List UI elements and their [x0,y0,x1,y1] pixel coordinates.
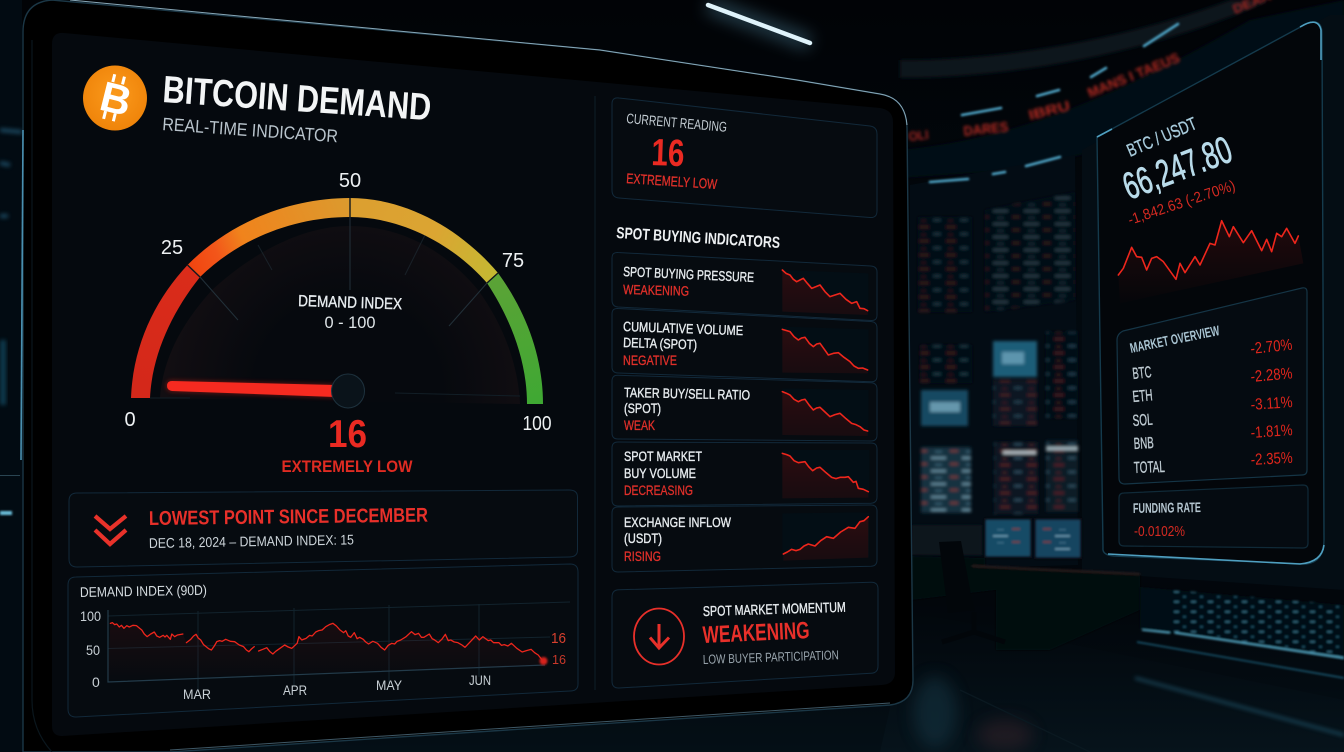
indicator: taker buy/sell ratio: (SPOT) [624,401,661,416]
gauge orange segment [188,198,350,277]
title: BITCOIN DEMAND [161,69,433,129]
market overview card: MARKET OVERVIEW [1128,322,1221,356]
market overview card: ETH [1132,387,1153,406]
indicator: spot market buy volume: DECREASING [624,483,693,498]
indicator: cumulative volume delta: NEGATIVE [623,353,677,368]
market overview card: SOL [1132,412,1153,430]
chart title: DEMAND INDEX (90D) [80,582,207,600]
indicator: exchange inflow [612,505,877,572]
y axis labels: 100 [80,608,101,624]
funding rate card [1119,485,1308,548]
pair label: BTC / USDT [1124,113,1200,161]
market panel [1097,22,1324,564]
scale label 100: 100 [522,413,552,435]
x axis labels: MAY [376,677,403,693]
section heading: spot buying indicators: SPOT BUYING INDICATORS [616,225,781,252]
market overview card: -2.70% [1250,337,1293,358]
dashboard screen [52,33,895,736]
y axis labels [80,608,101,690]
momentum note: LOW BUYER PARTICIPATION [703,647,839,667]
reading status: EXTREMELY LOW [626,170,718,192]
indicator: taker buy/sell ratio: WEAK [624,418,655,433]
secondary value label: 16 [552,652,566,667]
needle hub [332,374,364,408]
indicator: spot market buy volume: BUY VOLUME [624,466,696,481]
sparkline [782,388,869,436]
indicator: cumulative volume delta: DELTA (SPOT) [623,335,697,352]
background ticker [908,0,1274,144]
gauge value: 16 [328,413,367,456]
gauge yellow segment [350,198,498,283]
sparkline [782,327,869,373]
indicator: exchange inflow: EXCHANGE INFLOW [624,515,731,530]
momentum value: WEAKENING [702,617,810,649]
reading value: 16 [651,132,685,175]
background wall screens [912,192,1078,555]
gauge range: 0 - 100 [324,313,376,332]
ceiling light [708,5,810,43]
price change: -1,842.63 (-2.70%) [1126,177,1238,229]
gauge green segment [487,273,543,404]
indicator: spot buying pressure [612,252,877,321]
market overview card: TOTAL [1134,459,1165,477]
header: logo and title [83,66,433,146]
background ticker: MANS I TAEUS [1085,49,1182,101]
scale label 25: 25 [161,237,183,259]
sparkline [782,270,868,315]
main dashboard bezel [21,0,913,752]
indicator: taker buy/sell ratio [612,375,877,441]
market overview card: -2.28% [1250,365,1293,386]
background light strips [930,24,1178,182]
indicator: exchange inflow: RISING [624,549,661,564]
sparkline [782,450,869,498]
y axis labels: 0 [92,674,100,690]
panel highlight edges [1097,22,1324,564]
callout: lowest point [69,490,578,567]
chart axes [108,610,545,682]
gauge interior [160,226,520,404]
panel: spot market momentum [612,582,878,688]
market overview card: -1.81% [1250,422,1293,442]
indicator: spot market buy volume: SPOT MARKET [624,449,702,464]
icon: bitcoin coin [83,66,147,130]
gauge tick lines [200,217,487,326]
needle [166,380,335,398]
subtitle: REAL-TIME INDICATOR [162,114,339,146]
indicator: taker buy/sell ratio: TAKER BUY/SELL RATIO [624,385,750,403]
background ticker: IBRU [1027,97,1071,123]
indicator: spot buying pressure: WEAKENING [623,282,689,299]
line chart: demand index 90d [68,564,578,717]
sparkline [782,512,869,561]
background data strip [1137,587,1344,678]
chart grid [108,602,570,692]
market overview card: -2.35% [1250,450,1293,469]
x axis labels: MAR [183,686,211,702]
gauge red segment [131,265,200,398]
market overview card: BTC [1132,364,1152,383]
indicator: cumulative volume delta [612,308,877,382]
desk with monitors and chair [912,519,1140,650]
callout detail: DEC 18, 2024 – DEMAND INDEX: 15 [149,531,354,551]
background ticker: DARES [963,118,1009,139]
price line chart [1118,221,1303,303]
scale label 0: 0 [124,409,136,431]
momentum label: SPOT MARKET MOMENTUM [703,599,846,619]
gauge separators [188,198,498,283]
indicator: exchange inflow: (USDT) [624,531,662,546]
x axis labels: JUN [469,672,491,688]
callout heading: LOWEST POINT SINCE DECEMBER [149,505,428,530]
current point marker [540,657,548,665]
market overview card: BNB [1133,435,1154,453]
market overview card: -3.11% [1250,394,1293,414]
x axis labels: APR [283,682,307,698]
y axis labels: 50 [86,642,100,658]
scale label 75: 75 [502,250,524,272]
scale label 50: 50 [339,170,361,192]
column divider [594,96,596,690]
panel frame [1097,22,1324,564]
icon: bitcoin coin: B [96,72,136,125]
funding rate card: -0.0102% [1134,523,1185,540]
gauge baseline [150,393,520,398]
x axis labels [183,672,491,702]
gauge caption: DEMAND INDEX [298,293,403,313]
floor reflections [913,676,1344,752]
gauge [124,170,552,476]
icon: down arrow in circle [634,608,684,664]
current value label: 16 [551,630,566,647]
market overview card [1117,288,1307,484]
indicator: spot buying pressure: SPOT BUYING PRESSURE [623,264,754,285]
price: 66,247.80 [1117,129,1238,208]
panel: current reading [612,98,877,218]
demand line [108,623,544,680]
reading label: CURRENT READING [626,110,728,135]
funding rate card: FUNDING RATE [1133,499,1201,516]
indicator: spot market buy volume [612,442,877,506]
background ticker: OLI [908,127,929,144]
icon: double chevron down [95,516,126,544]
gauge status: EXTREMELY LOW [282,457,413,476]
indicator: cumulative volume delta: CUMULATIVE VOLUME [623,319,743,338]
